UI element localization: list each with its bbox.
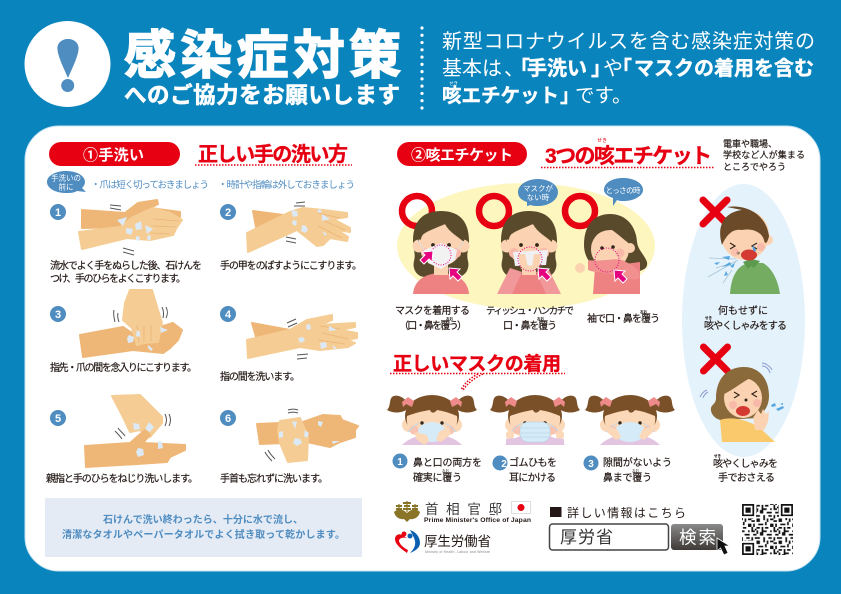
mask step 3 caption: 3 bbox=[588, 459, 594, 470]
title: 感染症対策 bbox=[124, 28, 401, 86]
step 4 bbox=[220, 306, 357, 359]
step 5 text: 親指と手のひらをねじり洗いします。 bbox=[46, 472, 198, 485]
callout: when no mask: ない時 bbox=[527, 193, 550, 202]
text: cover with hand bbox=[713, 453, 778, 484]
labels: cough etiquette captions: 袖で口・鼻を覆う bbox=[587, 312, 660, 325]
text: where to practice: 電車や職場、 bbox=[723, 138, 777, 149]
callout: dry hands: 石けんで洗い終わったら、十分に水で流し、 bbox=[103, 513, 303, 526]
labels: cough etiquette captions: おお bbox=[446, 316, 454, 321]
step 3: 3 bbox=[55, 309, 61, 321]
illustration: girl pinching mask bbox=[387, 395, 477, 445]
text: bad cough: せき bbox=[705, 315, 712, 320]
pill: hand washing bbox=[49, 142, 180, 166]
intro text: マスクの着用を含む bbox=[634, 57, 814, 80]
intro text: 手洗い bbox=[527, 57, 587, 80]
callout: before washing: 手洗いの bbox=[51, 172, 81, 182]
intro text: 咳エチケット bbox=[442, 85, 559, 107]
step 1 text: 流水でよく手をぬらした後、石けんを bbox=[50, 259, 202, 272]
ellipse: yellow backdrop bbox=[397, 183, 655, 309]
callout: in an instant: とっさの時 bbox=[606, 186, 641, 195]
icon: circle 1 bbox=[402, 196, 432, 226]
intro text: 基本は bbox=[442, 57, 502, 80]
panel: main white card bbox=[25, 126, 820, 571]
mask step 3 caption: おお bbox=[632, 468, 640, 473]
mask step 3 caption: 隙間がないよう bbox=[603, 456, 672, 469]
intro text: です。 bbox=[575, 85, 632, 107]
text: preparation tips: ・爪は短く切っておきましょう bbox=[91, 179, 209, 191]
step 5: 5 bbox=[55, 413, 61, 425]
callout: before washing: 前に bbox=[58, 182, 74, 192]
step 6 bbox=[220, 409, 358, 462]
text: where to practice: 学校など人が集まる bbox=[723, 149, 805, 160]
mask step 1 caption: 鼻と口の両方を bbox=[413, 456, 482, 469]
mask step 1 caption bbox=[392, 454, 482, 484]
logo: MHLW: 厚生労働省 bbox=[424, 534, 491, 549]
intro text: 「 bbox=[510, 57, 530, 80]
heading: 3 cough etiquettes: せき bbox=[597, 137, 607, 144]
text: cover with hand: せき bbox=[714, 453, 721, 458]
mask step 3 caption bbox=[584, 456, 672, 484]
text: where to practice bbox=[723, 138, 805, 172]
step 1 text: つけ、手のひらをよくこすります。 bbox=[50, 272, 186, 285]
mask step 2 caption: 耳にかける bbox=[509, 472, 556, 484]
search info: 詳しい情報はこちら bbox=[567, 505, 686, 520]
callout: when no mask bbox=[518, 179, 558, 206]
step 3 text: 指先・爪の間を念入りにこすります。 bbox=[50, 361, 197, 374]
text: preparation tips bbox=[91, 179, 355, 191]
heading: 3 cough etiquettes: 3つの咳エチケット bbox=[545, 145, 712, 168]
callout: in an instant bbox=[604, 178, 643, 206]
logo: Prime Minister's Office bbox=[394, 501, 531, 524]
illustration: woman with tissue bbox=[497, 211, 561, 294]
labels: cough etiquette captions: おお bbox=[537, 316, 544, 321]
callout: dry hands: 清潔なタオルやペーパータオルでよく拭き取って乾かします。 bbox=[62, 528, 345, 541]
intro text: 新型コロナウイルスを含む感染症対策の bbox=[442, 30, 815, 53]
step 1 bbox=[50, 200, 182, 255]
search box bbox=[550, 524, 668, 550]
search button: 検索 bbox=[679, 528, 718, 548]
illustration: girl adjusting mask bbox=[585, 395, 675, 445]
step 6 text: 手首も忘れずに洗います。 bbox=[220, 472, 328, 485]
icon: cross 2 bbox=[704, 347, 728, 371]
logo: MHLW: Ministry of Health, Labour and Welfare bbox=[425, 550, 490, 554]
mask step 2 caption: ゴムひもを bbox=[509, 456, 557, 469]
icon: cross 1 bbox=[703, 200, 727, 224]
mask step 1 caption: 確実に覆う bbox=[413, 471, 462, 484]
ellipse: blue backdrop bbox=[682, 184, 805, 457]
step 6: 6 bbox=[225, 413, 231, 425]
illustration: woman with mask bbox=[412, 211, 470, 294]
text: bad cough: 何もせずに bbox=[718, 304, 768, 317]
mask step 2 caption bbox=[492, 456, 557, 484]
illustration: woman sneezing into hand bbox=[700, 363, 784, 442]
logo: Prime Minister's Office: 首相官邸 bbox=[425, 502, 502, 517]
labels: cough etiquette captions bbox=[395, 304, 660, 332]
illustration: boy sneezing bbox=[708, 206, 780, 294]
heading: correct mask wearing: 正しいマスクの着用 bbox=[393, 353, 561, 375]
labels: cough etiquette captions: おお bbox=[640, 309, 648, 314]
dotted divider bbox=[420, 28, 424, 108]
step 2 text: 手の甲をのばすようにこすります。 bbox=[220, 259, 362, 272]
intro text: や bbox=[603, 58, 623, 80]
step 5 bbox=[50, 395, 185, 467]
text: preparation tips: ・時計や指輪は外しておきましょう bbox=[218, 179, 355, 191]
step 4 text: 指の間を洗います。 bbox=[220, 370, 300, 383]
logo: MHLW bbox=[395, 530, 491, 554]
icon: exclamation mark bbox=[24, 21, 110, 107]
labels: cough etiquette captions: マスクを着用する bbox=[395, 304, 470, 317]
text: bad cough bbox=[704, 304, 787, 332]
heading: how to wash hands: 正しい手の洗い方 bbox=[198, 143, 348, 166]
mask step 1 caption: おお bbox=[442, 468, 450, 473]
intro text: 」 bbox=[591, 58, 611, 80]
step 2: 2 bbox=[225, 207, 231, 219]
callout: before washing bbox=[47, 171, 86, 193]
step 4: 4 bbox=[225, 309, 232, 321]
step 2 bbox=[220, 202, 350, 252]
icon: cursor bbox=[717, 538, 730, 555]
logo: Prime Minister's Office: Prime Minister's Office of Japan bbox=[424, 517, 531, 524]
text: bad cough: 咳やくしゃみをする bbox=[704, 319, 787, 332]
heading: correct mask wearing bbox=[390, 353, 565, 390]
step 1 text bbox=[50, 259, 202, 285]
search button bbox=[671, 524, 723, 550]
intro text: 、 bbox=[504, 58, 524, 80]
mask step 3 caption: 鼻まで覆う bbox=[603, 471, 652, 484]
callout: when no mask: マスクが bbox=[523, 183, 553, 193]
text: where to practice: ところでやろう bbox=[723, 162, 786, 172]
step 3 bbox=[50, 290, 182, 357]
text: cover with hand: 手でおさえる bbox=[718, 471, 775, 484]
search box: 厚労省 bbox=[560, 528, 613, 547]
pill: cough etiquette bbox=[397, 142, 527, 166]
labels: cough etiquette captions: 口・鼻を覆う bbox=[503, 319, 557, 332]
intro text: 」 bbox=[560, 85, 580, 107]
icon: circle 3 bbox=[565, 196, 595, 226]
mask step 1 caption: 1 bbox=[397, 457, 403, 468]
mask step 2 caption: 2 bbox=[501, 459, 507, 470]
intro text: 「 bbox=[612, 57, 632, 80]
callout: dry hands bbox=[45, 498, 362, 557]
illustration: girl hooking straps bbox=[490, 395, 580, 445]
text: cover with hand: 咳やくしゃみを bbox=[713, 457, 778, 470]
icon: circle 2 bbox=[479, 196, 509, 226]
labels: cough etiquette captions: ティッシュ・ハンカチで bbox=[486, 306, 574, 317]
subtitle: へのご協力をお願いします bbox=[124, 82, 400, 108]
illustration: woman with sleeve bbox=[575, 214, 647, 294]
QR code bbox=[742, 504, 793, 555]
intro text bbox=[442, 30, 815, 107]
labels: cough etiquette captions: （口・鼻を覆う） bbox=[399, 319, 467, 332]
pill: cough etiquette: ②咳エチケット bbox=[411, 147, 513, 164]
step 1: 1 bbox=[55, 207, 61, 219]
intro text: せき bbox=[449, 81, 458, 86]
pill: hand washing: ①手洗い bbox=[83, 146, 144, 164]
